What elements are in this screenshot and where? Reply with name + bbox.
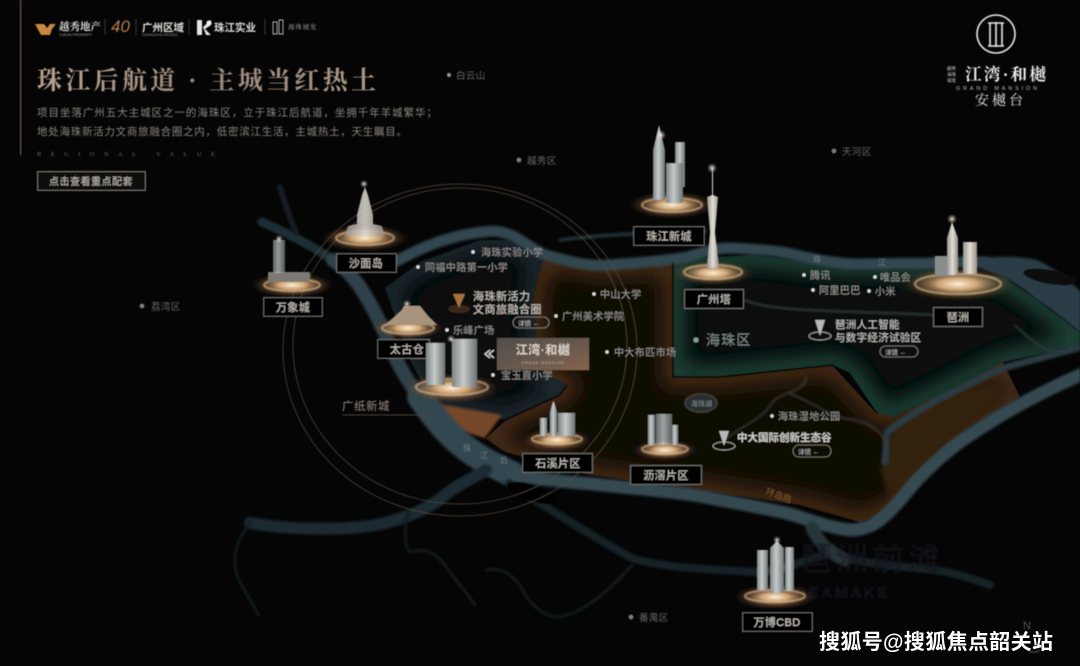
- logo: Zhujiang Industrial: [197, 20, 256, 35]
- landmark: Wanxiangcheng: [250, 235, 334, 298]
- label: Wanxiangcheng: 万象城: [276, 301, 310, 314]
- land: copper plot: [433, 403, 502, 438]
- label: project: [497, 338, 589, 370]
- left gold rule: [20, 0, 21, 155]
- feature text: 海珠新活力: [473, 289, 530, 303]
- landmark: Pazhou: [898, 214, 1018, 302]
- ghost watermark: [795, 541, 944, 602]
- poi: universities and markets: 中大布匹市场: [614, 346, 676, 359]
- label: Lijiao: [630, 466, 702, 484]
- landmark: Shamian island: [321, 180, 409, 252]
- road label: 环岛路: [764, 486, 793, 505]
- river labels: 江: [480, 451, 488, 460]
- rivers: [250, 222, 1080, 585]
- label: Pazhou: 琶洲: [947, 311, 969, 324]
- brand logo: 越秀: [947, 65, 956, 72]
- label: project: GRAND MANSION: [522, 361, 564, 365]
- poi: schools: [416, 246, 543, 274]
- feature: Haizhu vitality hub: [448, 289, 549, 328]
- landmark: Wanbo CBD: [733, 536, 817, 610]
- land: Pazhou green district: [672, 254, 1080, 418]
- district: Panyu: 番禺区: [639, 612, 669, 624]
- logo: Haizhu Urban Dev: [273, 20, 317, 34]
- pin icon: [448, 294, 470, 313]
- landmark: Canton Tower: [671, 163, 755, 286]
- label: Canton Tower: 广州塔: [697, 293, 731, 306]
- logo: Yuexiu: [35, 20, 101, 37]
- poi: tech firms: 唯品会: [880, 271, 911, 284]
- boundary lines: [485, 263, 877, 438]
- arrow: to project: [485, 350, 494, 358]
- detail pill: 详情 ←: [518, 318, 539, 328]
- intro text: 项目坐落广州五大主城区之一的海珠区，立于珠江后航道，坐拥千年羊城繁华；: [37, 106, 437, 119]
- button: [38, 172, 146, 190]
- landmark: Shixi: [521, 402, 593, 452]
- poi: schools: 同福中路第一小学: [425, 261, 508, 274]
- landmark: Zhujiang New Town: [628, 125, 716, 219]
- poi: Lefeng and Baoyu: 宝玉直小学: [501, 369, 553, 382]
- regional value caption: REGIONAL VALUE: [37, 151, 215, 158]
- source watermark: 搜狐号@搜狐焦点韶关站: [819, 631, 1053, 654]
- district: Tianhe: [832, 146, 872, 158]
- logo: Haizhu Urban Dev: 海珠城发: [288, 22, 317, 31]
- district: Liwan: [140, 301, 181, 313]
- logo: Yuexiu: YUEXIU PROPERTY: [59, 33, 93, 37]
- river labels: 航: [525, 460, 533, 470]
- label: Shixi: 石溪片区: [535, 457, 581, 470]
- landmark: Taikoo warehouse: [370, 300, 446, 340]
- district: Yuexiu: [517, 155, 557, 167]
- land: southern brown district: [486, 258, 1020, 522]
- label: Zhujiang New Town: [634, 226, 704, 246]
- label: Wanbo CBD: 万博CBD: [753, 616, 801, 629]
- label: Taikoo: [378, 340, 430, 358]
- label: Pazhou: [934, 308, 982, 326]
- pin icon: [713, 431, 735, 450]
- poi: universities and markets: 中山大学: [600, 288, 642, 301]
- river labels: 江: [878, 258, 886, 267]
- district: Tianhe: 天河区: [842, 146, 872, 158]
- label: Guangzhi new town: [342, 399, 432, 415]
- poi: universities and markets: [554, 288, 676, 359]
- feature: Pazhou AI zone: 与数字经济试验区: [835, 331, 921, 344]
- brand logo: 城发: [947, 77, 956, 84]
- logo wordmark: 江湾·和樾: [965, 64, 1046, 84]
- logo: Yuexiu: 越秀地产: [59, 20, 101, 33]
- label: Shamian: 沙面岛: [349, 256, 383, 270]
- small island south: [505, 477, 559, 509]
- label: project: 江湾·和樾: [516, 342, 570, 357]
- logo: Guangzhou region: GUANGZHOU REGION: [142, 33, 178, 37]
- ghost watermark: 琶洲前滩: [800, 541, 944, 577]
- feature: Zhongda innovation valley: [713, 431, 832, 457]
- title: 珠江后航道 · 主城当红热土: [37, 66, 376, 95]
- feature text: 中大国际创新生态谷: [737, 431, 832, 444]
- label: Taikoo: 太古仓: [390, 342, 424, 356]
- brand logo: GRAND MANSION: [956, 86, 1037, 92]
- poi: tech firms: 小米: [875, 285, 896, 298]
- district: Yuexiu: 越秀区: [527, 155, 557, 167]
- feature: Haizhu vitality hub: 文商旅融合圈: [473, 302, 542, 316]
- location rings: [283, 184, 637, 516]
- pin icon: [809, 320, 831, 340]
- poi: tech firms: 阿里巴巴: [819, 285, 861, 297]
- label: Lijiao: 沥滘片区: [643, 469, 689, 482]
- lake: Haizhu Lake: [685, 394, 717, 412]
- feature: Pazhou AI zone: [809, 318, 921, 357]
- logo emblem: [977, 15, 1015, 53]
- poi: Lefeng and Baoyu: 乐峰广场: [453, 324, 495, 337]
- poi: tech firms: [802, 269, 911, 298]
- intro text: 地处海珠新活力文商旅融合圈之内，低密滨江生活，主城热土，天生瞩目。: [37, 125, 407, 138]
- label: Wanbo CBD: [742, 612, 812, 632]
- poi: schools: 海珠实验小学: [481, 246, 543, 259]
- logo: Zhujiang Industrial: 珠江实业: [214, 21, 256, 34]
- label: Wanxiangcheng: [264, 298, 322, 316]
- district: Haizhu: 海珠区: [706, 332, 752, 348]
- poi: wetland: 海珠湿地公园: [778, 410, 840, 423]
- district: Baiyun: 白云山: [456, 70, 486, 82]
- logo: 40 years: 40: [111, 17, 130, 36]
- label: Zhujiang New Town: 珠江新城: [646, 229, 692, 243]
- button: 点击查看重点配套: [49, 175, 133, 188]
- landmark: project towers: [402, 335, 502, 404]
- poi: tech firms: 腾讯: [810, 269, 831, 282]
- detail pill: 详情 ←: [885, 348, 906, 356]
- river labels: 珠: [463, 443, 471, 453]
- district: Liwan: 荔湾区: [151, 301, 181, 313]
- detail pill: 详情 ←: [798, 447, 819, 456]
- intro text: [37, 106, 437, 138]
- ghost watermark: DEAMAKE: [795, 585, 890, 602]
- developer logos: [35, 17, 317, 37]
- lake label: 海珠湖: [691, 399, 712, 408]
- label: Shixi: [522, 454, 592, 472]
- river labels: 珠: [813, 254, 821, 264]
- landmark: Lijiao: [631, 414, 699, 461]
- brand logo: 海珠: [947, 71, 956, 78]
- thin tributaries: [235, 187, 1060, 617]
- island in river: [1022, 265, 1078, 289]
- river labels: 后: [500, 455, 508, 465]
- label: Guangzhi new town: 广纸新城: [342, 399, 390, 413]
- feature text: 琶洲人工智能: [835, 318, 900, 331]
- compass: [1023, 620, 1040, 652]
- compass: N: [1023, 620, 1031, 632]
- poi: universities and markets: 广州美术学院: [562, 310, 624, 323]
- map: rivers and land: [235, 187, 1080, 617]
- district: Panyu: [629, 612, 669, 624]
- POI labels: [342, 246, 911, 505]
- label: Canton Tower: [684, 290, 744, 308]
- logo: Guangzhou region: 广州区域: [142, 21, 184, 34]
- label: Shamian: [336, 254, 396, 272]
- brand logo: 安樾台: [975, 92, 1023, 109]
- brand logo: [947, 15, 1046, 109]
- river labels: [463, 254, 886, 470]
- poi: Lefeng and Baoyu: [445, 324, 553, 382]
- land: western teal district: [380, 235, 570, 425]
